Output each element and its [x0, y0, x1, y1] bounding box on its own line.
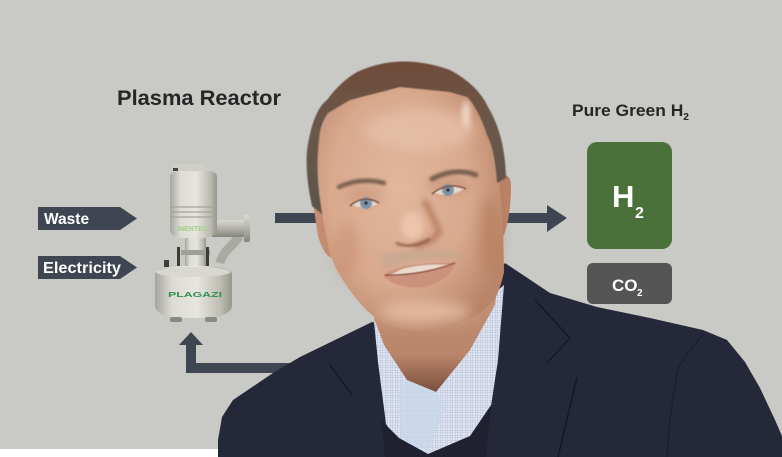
label arrow: Waste: [38, 207, 137, 230]
label arrow: Electricity: Electricity: [43, 260, 121, 277]
reactor side pipe: [220, 236, 240, 263]
jacket: [218, 263, 782, 457]
heading: Pure Green H2: Pure Green H: [572, 101, 681, 120]
white strip bottom left: [0, 449, 222, 457]
reactor lower vessel: [155, 266, 232, 318]
heading: Plasma Reactor: Plasma Reactor: [117, 86, 282, 110]
label arrow: Waste: Waste: [44, 211, 89, 228]
box: H2: [587, 142, 672, 249]
neck: [374, 270, 500, 392]
sweater: [381, 405, 491, 457]
jacket lapel lines: [330, 300, 703, 457]
box: CO2: [587, 263, 672, 304]
forehead highlight: [462, 101, 470, 129]
reactor upper vessel: [173, 164, 206, 173]
reactor neck: [185, 236, 206, 266]
shirt: [374, 285, 504, 457]
left eye: [350, 197, 379, 209]
box: H2: H: [612, 179, 634, 214]
label arrow: Electricity: [38, 256, 137, 279]
mouth: [379, 249, 462, 288]
nose: [396, 200, 439, 246]
heading: Pure Green H2: 2: [683, 112, 689, 123]
icon: plasma reactor machine: PLAGAZI: [168, 290, 222, 299]
box: CO2: 2: [637, 288, 643, 299]
arrow: return loop to reactor: [179, 332, 295, 368]
box: CO2: CO: [612, 276, 638, 295]
reactor logo text: INENTEC: [177, 226, 208, 233]
face: [317, 74, 504, 331]
portrait of man: [218, 61, 782, 457]
arrow: reactor to hydrogen: [275, 205, 567, 232]
collar fold: [398, 380, 447, 452]
ears: [312, 195, 332, 258]
box: H2: 2: [635, 205, 644, 222]
cheek shading: [335, 110, 500, 323]
icon: plasma reactor machine: [155, 164, 250, 322]
right eye: [432, 184, 466, 196]
hair: [307, 61, 506, 214]
eyebrows: [339, 172, 476, 187]
